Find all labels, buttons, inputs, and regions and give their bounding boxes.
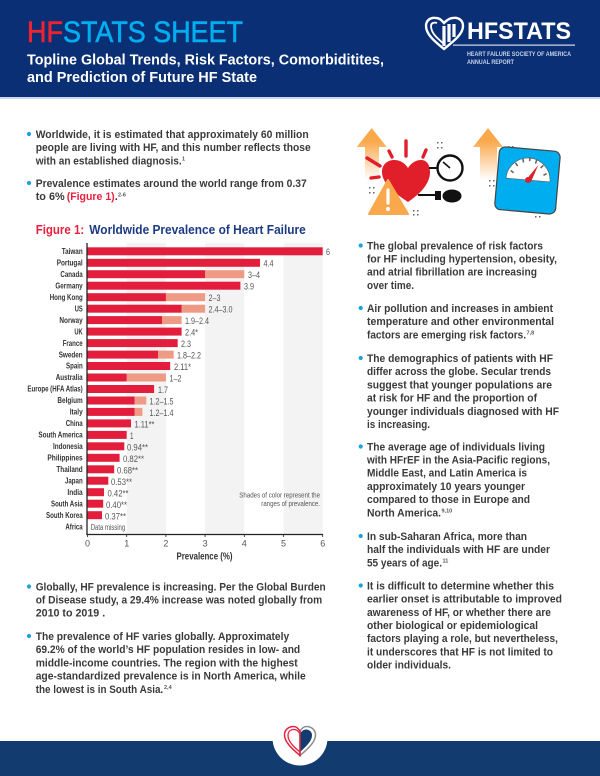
bullet: sub-Saharan Africa xyxy=(359,531,551,569)
row: France: 2.3 xyxy=(181,339,191,349)
bullet: average age: compared to those in Europe and xyxy=(367,494,530,506)
row: France xyxy=(63,338,191,349)
row: Philippines xyxy=(47,452,144,464)
bullet: global variation: the lowest is in South Asia. xyxy=(36,684,163,696)
x axis tick labels: 1 xyxy=(124,539,129,549)
row: Germany: 3.9 xyxy=(244,282,254,292)
subtitle: and Prediction of Future HF State xyxy=(27,70,257,86)
bullet: global increase: 2010 to 2019 . xyxy=(36,608,105,620)
figure heading: Figure 1: xyxy=(36,222,84,237)
row: UK xyxy=(74,326,198,338)
chart axes xyxy=(87,243,323,537)
x axis tick labels: 0 xyxy=(85,539,90,549)
bullet: sub-Saharan Africa: In sub-Saharan Africa, more than xyxy=(367,531,527,543)
icon: heart risk factors xyxy=(357,128,462,216)
bullet: average age: approximately 10 years younger xyxy=(367,481,526,493)
row: Belgium: 1.2–1.5 xyxy=(150,396,174,406)
logo: HFSTATS xyxy=(426,18,575,66)
row: Hong Kong: 2–3 xyxy=(208,293,220,303)
row: South Korea: South Korea xyxy=(46,510,83,520)
x axis tick labels: 4 xyxy=(242,539,247,549)
logo: HFSTATS: HFSTATS xyxy=(467,18,571,45)
bullet: earlier onset: other biological or epidemiological xyxy=(367,620,538,632)
row: Philippines: Philippines xyxy=(47,452,83,462)
chart note xyxy=(239,491,320,508)
bullet: demographics: The demographics of patients with HF xyxy=(367,353,553,365)
row: South Asia: South Asia xyxy=(51,498,83,508)
row: Spain: 2.11* xyxy=(174,362,191,372)
row: Norway: 1.9–2.4 xyxy=(185,316,209,326)
bullet: prevalence estimates: 2-6 xyxy=(118,192,126,198)
bullet: risk factors increasing xyxy=(359,240,557,292)
row: Belgium: Belgium xyxy=(57,395,83,405)
header banner xyxy=(0,0,600,99)
row: Africa: Data missing xyxy=(91,523,125,532)
bullet: global variation: age-standardized prevalence is in North America, while xyxy=(36,671,306,683)
bullet: demographics: at risk for HF and the proportion of xyxy=(367,393,537,405)
row: Japan: 0.53** xyxy=(111,477,132,487)
footer heart badge xyxy=(272,710,328,766)
logo: HFSTATS: ANNUAL REPORT xyxy=(467,60,514,66)
x axis tick labels: 2 xyxy=(163,539,168,549)
row: Hong Kong: Hong Kong xyxy=(50,292,83,302)
row: Europe (HFA Atlas) xyxy=(27,384,168,395)
row: Australia: 1–2 xyxy=(170,374,182,384)
bullet: air pollution xyxy=(359,303,554,341)
bullet: air pollution: factors are emerging risk factors. xyxy=(367,329,526,341)
row: South America: 1 xyxy=(130,431,134,441)
row: India: 0.42** xyxy=(108,488,129,498)
row: Germany: Germany xyxy=(55,280,83,290)
bullet: global variation: 2,4 xyxy=(164,685,173,691)
bullet: average age: 9,10 xyxy=(442,508,452,514)
row: Norway xyxy=(59,315,209,326)
logo: HFSTATS: HEART FAILURE SOCIETY OF AMERICA xyxy=(467,52,572,58)
x axis tick labels xyxy=(85,539,325,549)
row: UK: 2.4* xyxy=(185,328,198,338)
title: STATS SHEET xyxy=(63,16,243,49)
row: France: France xyxy=(63,338,83,348)
row: Japan: Japan xyxy=(65,475,83,485)
row: South America: South America xyxy=(38,430,83,440)
title: HF xyxy=(27,16,63,49)
row: Germany xyxy=(55,280,254,292)
bullet: sub-Saharan Africa: 55 years of age. xyxy=(367,557,442,569)
row: Sweden xyxy=(59,349,201,360)
bullet: global variation xyxy=(27,631,306,696)
bullet: prevalence estimates: to 6% xyxy=(36,191,65,203)
bullet: worldwide 60 million: with an established diagnosis. xyxy=(35,155,182,167)
bullet: global increase xyxy=(27,581,326,620)
row: Thailand: 0.68** xyxy=(117,466,138,476)
bullet: sub-Saharan Africa: half the individuals with HF are under xyxy=(367,544,551,556)
row: Italy: 1.2–1.4 xyxy=(150,408,174,418)
bullet: average age: The average age of individuals living xyxy=(367,441,545,453)
icon: scale xyxy=(473,128,561,218)
bullet: earlier onset: It is difficult to determine whether this xyxy=(367,580,554,592)
row: Indonesia: 0.94** xyxy=(127,442,148,452)
row: Africa: Africa xyxy=(65,521,83,531)
row: Hong Kong xyxy=(50,292,220,303)
row: Sweden: Sweden xyxy=(59,349,83,359)
x axis tick labels: 3 xyxy=(203,539,208,549)
row: US: 2.4–3.0 xyxy=(208,304,232,314)
bullet: global variation: 69.2% of the world’s HF population resides in low- and xyxy=(36,644,300,656)
subtitle: Topline Global Trends, Risk Factors, Comorbiditites, xyxy=(27,52,384,68)
bullet: sub-Saharan Africa: 11 xyxy=(442,558,448,564)
row: South Asia: 0.40** xyxy=(106,500,127,510)
row: UK: UK xyxy=(74,326,83,336)
bullet: risk factors increasing: for HF including hypertension, obesity, xyxy=(367,254,557,266)
row: US xyxy=(75,303,232,314)
row: India: India xyxy=(67,487,83,497)
row: South Asia xyxy=(51,498,127,510)
bullet: earlier onset: it underscores that HF is not limited to xyxy=(367,646,553,658)
bullet: air pollution: temperature and other environmental xyxy=(367,316,554,328)
bullet: worldwide 60 million: people are living with HF, and this number reflects those xyxy=(36,142,311,154)
row: South Korea: 0.37** xyxy=(105,512,126,522)
row: Sweden: 1.8–2.2 xyxy=(177,350,201,360)
bullet: demographics xyxy=(359,353,559,431)
bullet: demographics: differ across the globe. Secular trends xyxy=(367,366,551,378)
figure heading: Worldwide Prevalence of Heart Failure xyxy=(89,222,306,237)
row: China xyxy=(66,418,155,430)
row: Thailand xyxy=(56,464,138,476)
subtitle xyxy=(27,52,384,86)
bullet: worldwide 60 million: Worldwide, it is estimated that approximately 60 million xyxy=(36,129,309,141)
bullet: prevalence estimates: (Figure 1) xyxy=(67,191,115,203)
row: Europe (HFA Atlas): 1.7 xyxy=(158,385,168,395)
row: South America xyxy=(38,430,134,441)
row: Canada: 3–4 xyxy=(248,270,260,280)
footer band xyxy=(0,741,600,776)
bullet: air pollution: 7,8 xyxy=(526,330,534,336)
bullet: global increase: Globally, HF prevalence is increasing. Per the Global Burden xyxy=(36,581,326,593)
row: Japan xyxy=(65,475,132,487)
bullet: demographics: suggest that younger populations are xyxy=(367,379,552,391)
bullet: prevalence estimates: . xyxy=(115,191,118,203)
bullet: global increase: of Disease study, a 29.4% increase was noted globally from xyxy=(36,594,322,606)
bullet: prevalence estimates: Prevalence estimates around the world range from 0.37 xyxy=(36,178,307,190)
row: China: 1.11** xyxy=(134,420,155,430)
row: South Korea xyxy=(46,510,126,522)
row: Canada xyxy=(60,269,260,280)
bullet: average age: with HFrEF in the Asia-Pacific regions, xyxy=(366,454,550,466)
row: Taiwan: Taiwan xyxy=(62,246,83,256)
bullet: demographics: younger individuals diagnosed with HF xyxy=(367,406,559,418)
bullet: average age: North America. xyxy=(367,507,441,519)
chart note: Shades of color represent the xyxy=(239,491,320,500)
row: Portugal xyxy=(57,258,274,268)
bar chart: worldwide prevalence xyxy=(27,243,330,562)
bullet: earlier onset: factors playing a role, but nevertheless, xyxy=(367,633,558,645)
x axis tick labels: 5 xyxy=(281,539,286,549)
bullet: air pollution: Air pollution and increases in ambient xyxy=(367,303,553,315)
row: Africa xyxy=(65,521,125,532)
row: US: US xyxy=(75,303,83,313)
bullet: prevalence estimates xyxy=(27,178,307,203)
bullet: risk factors increasing: and atrial fibrillation are increasing xyxy=(367,267,537,279)
row: Philippines: 0.82** xyxy=(123,454,144,464)
bullet: earlier onset: earlier onset is attributable to improved xyxy=(367,594,562,606)
bullet: demographics: is increasing. xyxy=(367,419,430,431)
bullet: risk factors increasing: over time. xyxy=(367,280,414,292)
row: Australia: Australia xyxy=(56,372,83,382)
row: Europe (HFA Atlas): Europe (HFA Atlas) xyxy=(27,384,83,394)
bullet: global variation: middle-income countries. The region with the highest xyxy=(36,657,298,669)
row: Australia xyxy=(56,372,182,384)
row: Taiwan: 6 xyxy=(326,247,330,257)
row: Italy xyxy=(70,407,174,418)
row: Belgium xyxy=(57,395,174,406)
row: China: China xyxy=(66,418,83,428)
bullet: average age: Middle East, and Latin America is xyxy=(367,468,527,480)
bullet: global variation: The prevalence of HF varies globally. Approximately xyxy=(36,631,290,643)
chart note: ranges of prevalence. xyxy=(261,499,320,508)
bullet: risk factors increasing: The global prevalence of risk factors xyxy=(367,240,543,252)
row: Thailand: Thailand xyxy=(56,464,83,474)
row: Spain: Spain xyxy=(66,361,83,371)
row: Norway: Norway xyxy=(59,315,83,325)
row: Canada: Canada xyxy=(60,269,83,279)
bullet: average age xyxy=(359,441,550,519)
bullet: worldwide 60 million xyxy=(27,129,311,167)
bullet: worldwide 60 million: 1 xyxy=(182,156,185,162)
row: Spain xyxy=(66,361,191,372)
row: Taiwan xyxy=(62,246,330,257)
x axis tick labels: 6 xyxy=(320,539,325,549)
row: Italy: Italy xyxy=(70,407,83,417)
row: Indonesia xyxy=(53,441,148,452)
bullet: earlier onset: awareness of HF, or whether there are xyxy=(367,607,551,619)
row: Portugal: Portugal xyxy=(57,258,83,268)
row: Indonesia: Indonesia xyxy=(53,441,83,451)
row: India xyxy=(67,487,129,498)
x axis title: Prevalence (%) xyxy=(176,550,232,562)
row: Portugal: 4.4 xyxy=(264,258,274,268)
bullet: earlier onset xyxy=(359,580,562,672)
bullet: earlier onset: older individuals. xyxy=(367,660,451,672)
